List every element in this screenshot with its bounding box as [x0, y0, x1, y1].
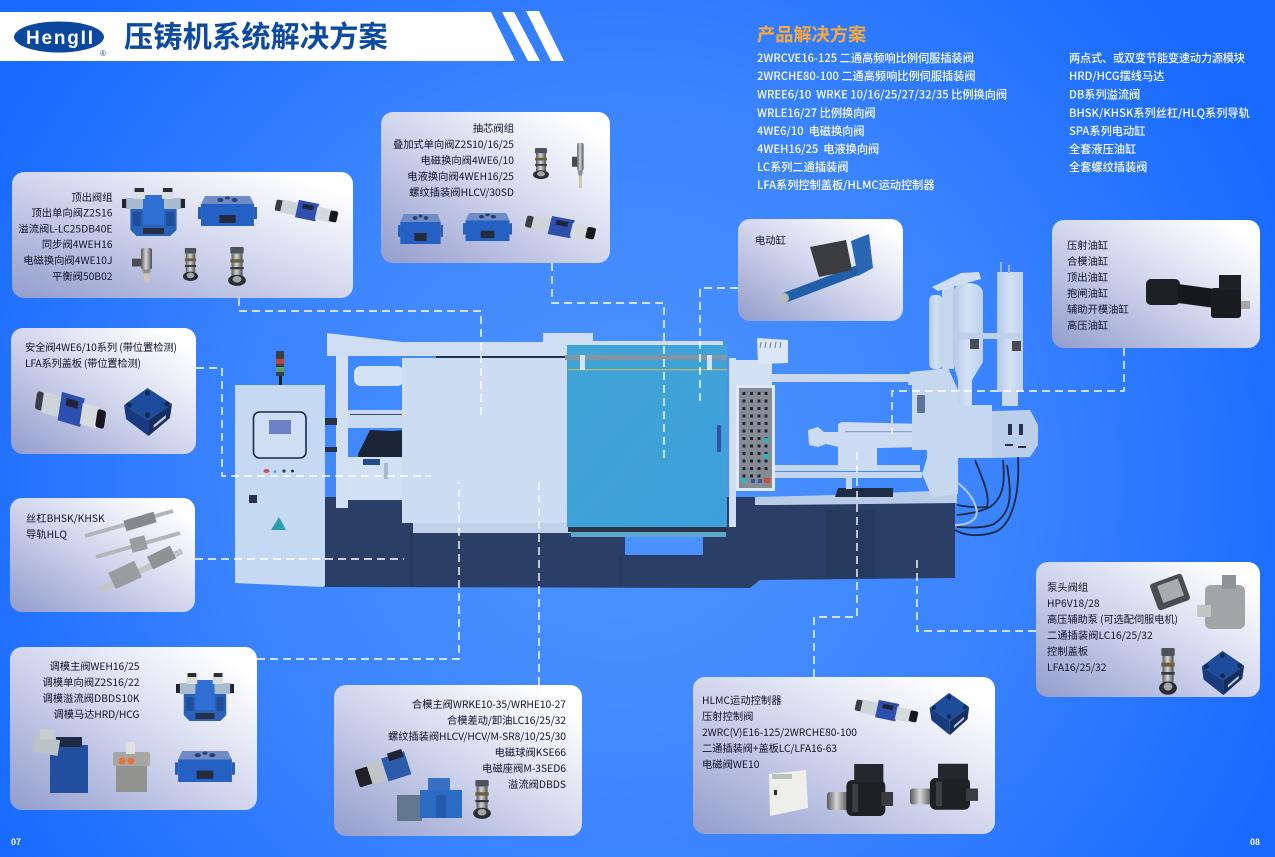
panel: HLMC controller	[693, 677, 995, 834]
panel text	[388, 696, 566, 791]
operator panel	[736, 385, 775, 491]
right neck	[1002, 392, 1018, 406]
panel background	[381, 112, 610, 263]
panel text: 安全阀4WE6/10系列 (带位置检测)	[25, 339, 177, 354]
icon: cover block	[930, 693, 969, 735]
warning triangle	[271, 517, 286, 530]
icon: stack valve	[176, 673, 234, 721]
icon: solenoid valve	[274, 196, 339, 225]
carriage mechanism	[358, 430, 404, 458]
valve block	[992, 410, 1038, 458]
list column right: BHSK/KHSK系列丝杠/HLQ系列导轨	[1069, 105, 1250, 121]
icon: cartridge	[473, 780, 491, 819]
control cabinet	[235, 385, 325, 587]
list column left: 4WEH16/25 电液换向阀	[757, 141, 879, 157]
panel text: 电动缸	[755, 232, 786, 247]
accumulator right	[997, 272, 1023, 392]
panel text: 高压油缸	[1067, 317, 1108, 332]
teal sliding door	[567, 345, 727, 527]
icon: solenoid valve	[524, 212, 597, 242]
panel text: 顶出油缸	[1067, 269, 1108, 284]
panel text: 螺纹插装阀HLCV/30SD	[409, 184, 514, 199]
accumulator left	[929, 295, 943, 369]
list column left: 4WE6/10 电磁换向阀	[757, 123, 865, 139]
panel text: 电磁阀WE10	[702, 756, 760, 771]
base details	[410, 510, 875, 587]
panel text: 顶出阀组	[71, 189, 112, 204]
icon: plate valve grey	[398, 214, 443, 244]
panel text: 螺纹插装阀HLCV/HCV/M-SR8/10/25/30	[388, 728, 566, 743]
upper tie bar	[770, 374, 912, 382]
lower tie bars	[775, 465, 922, 478]
list column left: WREE6/10 WRKE 10/16/25/27/32/35 比例换向阀	[757, 86, 1007, 102]
injection carriage	[808, 422, 925, 497]
panel background	[10, 498, 195, 612]
carriage box	[347, 457, 403, 500]
panel text	[26, 510, 105, 541]
hydraulic hoses	[955, 457, 1018, 535]
icon: seat valve one	[827, 764, 893, 816]
bridge	[953, 333, 1023, 339]
panel text: 电磁球阀KSE66	[495, 744, 566, 759]
panel text: 合模油缸	[1067, 253, 1108, 268]
list heading: 产品解决方案	[757, 21, 866, 47]
title: 压铸机系统解决方案	[124, 14, 388, 56]
door bottom	[568, 527, 727, 537]
panel text: 丝杠BHSK/KHSK	[26, 510, 105, 525]
gauge labels	[970, 339, 1021, 351]
cabinet switch	[249, 495, 257, 503]
panel background	[1052, 220, 1260, 348]
base opening	[625, 537, 703, 555]
panel text: 调模溢流阀DBDS10K	[42, 690, 140, 705]
icon: plate valve	[175, 751, 235, 782]
panel text: LFA系列盖板 (带位置检测)	[25, 355, 141, 370]
header banner	[0, 11, 564, 61]
panel text	[18, 189, 113, 283]
list column left: LFA系列控制盖板/HLMC运动控制器	[757, 177, 935, 193]
panel text: 二通插装阀+盖板LC/LFA16-63	[702, 740, 837, 755]
icon: ball screw two	[96, 533, 180, 557]
icon: controller module	[769, 770, 808, 816]
main frame	[908, 368, 992, 497]
icon: servo valve	[397, 778, 462, 821]
panel: safety valve	[11, 328, 196, 454]
accumulator center	[953, 283, 983, 405]
icon: piston pump	[1149, 573, 1191, 611]
panel background	[11, 328, 196, 454]
icon: auxiliary pump	[1197, 575, 1245, 629]
hoses at cabinet	[325, 418, 337, 452]
side column	[729, 358, 736, 527]
panel text: 电磁座阀M-3SED6	[482, 760, 566, 775]
panel text: 高压辅助泵 (可选配伺服电机)	[1047, 611, 1178, 626]
panel text: 抱闸油缸	[1067, 285, 1108, 300]
panel text: 顶出单向阀Z2S16	[32, 204, 113, 220]
central guard door	[402, 358, 568, 523]
accumulator bolts	[1000, 262, 1010, 273]
dashed connector lines	[195, 263, 1124, 685]
panel background	[12, 172, 353, 298]
icon: black cylinder	[1146, 275, 1250, 318]
list column left: 2WRCVE16-125 二通高频响比例伺服插装阀	[757, 50, 974, 66]
icon: stack valve	[122, 188, 185, 236]
panel text: 叠加式单向阀Z2S10/16/25	[393, 136, 514, 151]
page number left: 07	[11, 836, 21, 848]
accumulator post	[942, 283, 954, 369]
top junction box	[757, 338, 788, 364]
icon: cycloid motor	[113, 742, 150, 792]
back cylinder	[354, 366, 404, 386]
frame window	[917, 395, 925, 413]
panel text	[1047, 579, 1178, 674]
light hose	[955, 483, 977, 525]
panel text: 压射控制阀	[702, 708, 753, 723]
lower door strip	[413, 523, 571, 533]
panel text: 调模马达HRD/HCG	[54, 706, 140, 721]
cabinet buttons	[264, 469, 294, 473]
logo: Hengli: HengII	[26, 28, 93, 49]
machine base	[323, 497, 955, 588]
panel: core pull valves	[381, 112, 610, 263]
door rail	[565, 355, 727, 370]
icon: cover block	[124, 388, 172, 436]
panel text: 合模主阀WRKE10-35/WRHE10-27	[412, 696, 566, 711]
panel text	[393, 120, 514, 199]
panel text: 溢流阀DBDS	[508, 776, 566, 791]
icon: cartridge	[1159, 648, 1177, 695]
control box top	[730, 360, 772, 385]
panel text: HP6V18/28	[1047, 595, 1100, 610]
icon: cartridge	[533, 148, 549, 179]
panel text: 压射油缸	[1067, 237, 1108, 252]
panel text	[1067, 237, 1129, 332]
machine deck	[755, 490, 957, 505]
touch screen	[254, 412, 306, 458]
panel text: 辅助开模油缸	[1067, 301, 1129, 316]
signal tower	[276, 351, 284, 385]
logo: Hengli	[14, 22, 106, 58]
list column right: 全套螺纹插装阀	[1069, 159, 1147, 175]
mid bar	[348, 410, 404, 428]
panel text: 电液换向阀4WEH16/25	[407, 168, 514, 183]
panel text: 同步阀4WEH16	[42, 236, 113, 251]
icon: solenoid valve	[854, 696, 919, 725]
icon: linear guide	[100, 551, 182, 590]
logo: Hengli: ®	[100, 49, 106, 58]
panel: pump head valves	[1036, 562, 1260, 697]
top plate	[932, 272, 981, 291]
panel text: 调模单向阀Z2S16/22	[42, 674, 140, 689]
panel text: 溢流阀L-LC25DB40E	[18, 220, 112, 236]
product solutions list	[757, 21, 1250, 193]
panel text: 平衡阀50B02	[52, 268, 113, 283]
panel: mould adjust valves	[10, 647, 257, 810]
panel text: 2WRC(V)E16-125/2WRCHE80-100	[702, 724, 857, 739]
panel text: 控制盖板	[1047, 643, 1088, 658]
icon: balance valve	[228, 247, 246, 286]
panel text: 导轨HLQ	[26, 526, 67, 541]
panel text: LFA16/25/32	[1047, 659, 1107, 674]
panel background	[738, 219, 903, 321]
panel background	[1036, 562, 1260, 697]
door handle	[717, 425, 721, 452]
list column left: WRLE16/27 比例换向阀	[757, 105, 876, 121]
page number right: 08	[1250, 836, 1260, 848]
icon: sensor valve	[132, 248, 152, 283]
panel text: 二通插装阀LC16/25/32	[1047, 627, 1153, 642]
icon: safety valve	[34, 385, 107, 434]
icon: cartridge valve	[183, 248, 198, 281]
panel text: 合模差动/卸油LC16/25/32	[447, 712, 566, 727]
icon: seat valve two	[910, 764, 978, 810]
beam dark line	[436, 356, 566, 358]
panel background	[693, 677, 995, 834]
list column right: 两点式、或双变节能变速动力源模块	[1069, 50, 1245, 66]
icon: relief valve	[32, 729, 88, 793]
die casting machine	[235, 262, 1038, 588]
list column right: 全套液压油缸	[1069, 141, 1136, 157]
icon: electric cylinder	[779, 234, 873, 303]
panel background	[10, 647, 257, 810]
panel: clamp valves	[334, 685, 582, 836]
vertical post	[336, 356, 348, 508]
banner white bar	[0, 12, 515, 61]
panel text: 电磁换向阀4WE6/10	[420, 152, 514, 167]
panel text: 调模主阀WEH16/25	[50, 658, 140, 673]
list column right: SPA系列电动缸	[1069, 123, 1145, 139]
icon: plate valve	[198, 196, 257, 226]
panel: ball screw and guide	[10, 498, 195, 612]
panel: hydraulic cylinders	[1052, 220, 1260, 348]
panel text	[42, 658, 140, 721]
panel text	[702, 692, 857, 771]
list column right: DB系列溢流阀	[1069, 86, 1140, 102]
list column right: HRD/HCG摆线马达	[1069, 68, 1164, 84]
panel text: 泵头阀组	[1047, 579, 1088, 594]
banner stripes	[502, 11, 564, 61]
panel text: 电磁换向阀4WE10J	[23, 252, 112, 267]
list column left: 2WRCHE80-100 二通高频响比例伺服插装阀	[757, 68, 976, 84]
icon: sensor valve	[572, 143, 584, 188]
upper beam	[327, 333, 723, 356]
icon: cover block	[1202, 651, 1244, 695]
door hangers	[580, 355, 712, 370]
panel: ejector valve group	[12, 172, 353, 298]
list column left	[757, 50, 1007, 193]
panel text	[25, 339, 177, 370]
icon: plate valve blue	[463, 213, 512, 241]
panel background	[334, 685, 582, 836]
panel: electric cylinder	[738, 219, 903, 321]
icon: ball screw one	[85, 511, 173, 536]
list column right	[1069, 50, 1250, 175]
panel text: HLMC运动控制器	[702, 692, 782, 707]
icon: ball valve	[353, 748, 411, 790]
panel text: 抽芯阀组	[473, 120, 514, 135]
list column left: LC系列二通插装阀	[757, 159, 848, 175]
